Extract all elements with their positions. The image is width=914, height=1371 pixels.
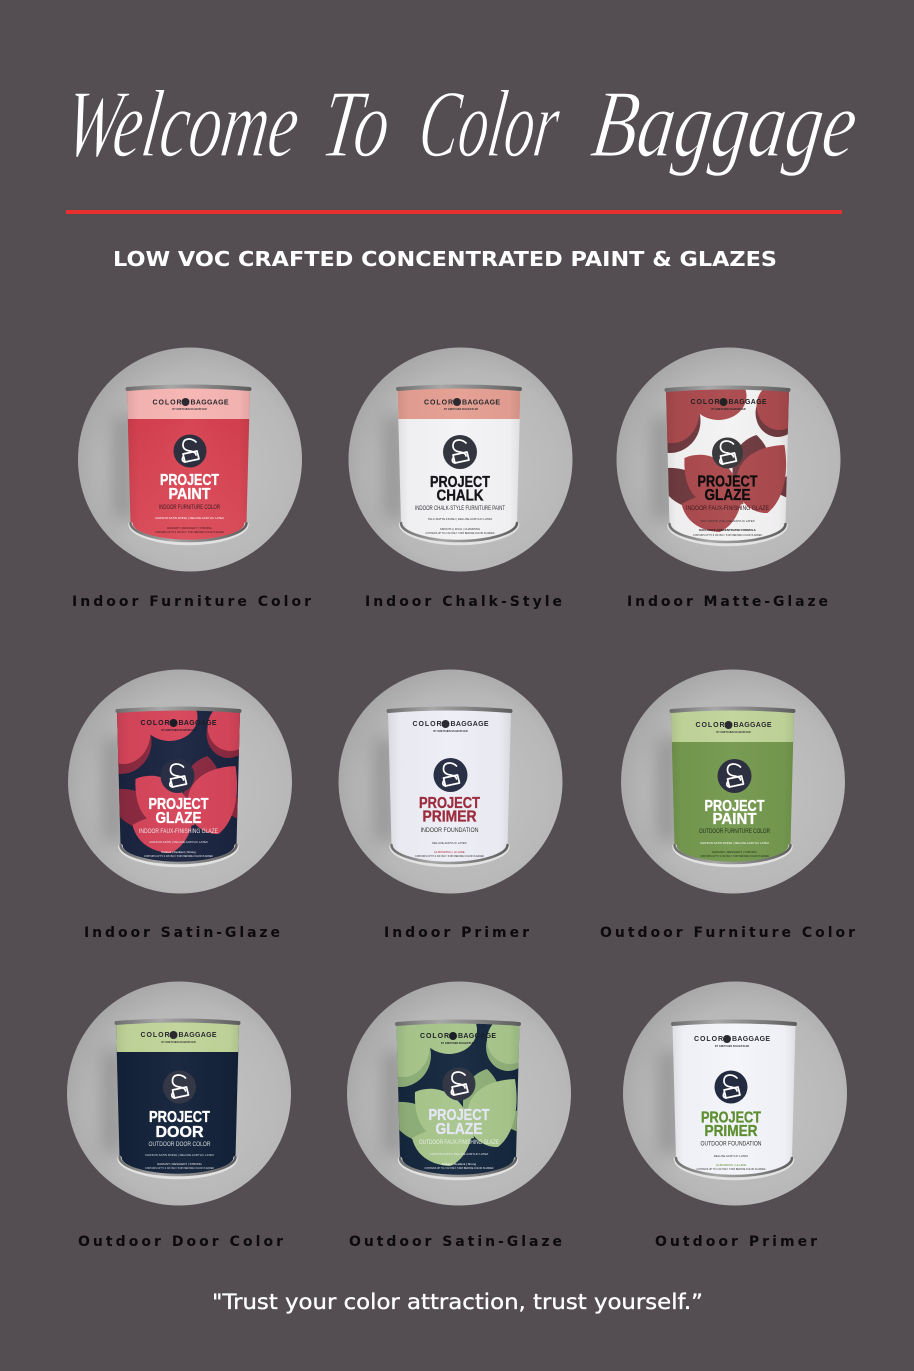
can: Project Paint outdoor: PROJECT xyxy=(704,798,765,815)
can: Project Primer outdoor: PROJECT xyxy=(701,1110,761,1126)
can: Project Primer indoor: DELUXE ACRYLIC LATEX xyxy=(432,841,467,845)
can: Project Paint: PAINT xyxy=(168,486,211,503)
label row 1 xyxy=(72,594,828,610)
product: Indoor Chalk-Style xyxy=(348,348,572,572)
can: Project Paint: BY GRETCHEN SCHAUFFLER xyxy=(172,408,207,411)
can: Project Paint: BAGGAGE xyxy=(190,400,229,406)
can: Project Primer indoor: BAGGAGE xyxy=(450,721,489,728)
product: Outdoor Satin-Glaze xyxy=(347,982,571,1206)
can: Project Chalk: CONTAINS UP TO 2 OZ ONLY. 5 MIX BEFORE COLOR IS ADDED xyxy=(426,532,495,535)
can: Project Paint outdoor: BY GRETCHEN SCHAUFFLER xyxy=(716,731,751,734)
can: Project Chalk: BY GRETCHEN SCHAUFFLER xyxy=(444,408,478,411)
product: Indoor Satin-Glaze xyxy=(68,670,292,894)
can: Project Paint: CONTAINS UP TO 2 OZ ONLY. 5 MIX BEFORE COLOR IS ADDED xyxy=(155,531,224,534)
can: Project Primer indoor: BY GRETCHEN SCHAUFFLER xyxy=(433,730,468,733)
can: Project Chalk: COLOR xyxy=(424,400,453,406)
can: Project Glaze indoor: GLAZE xyxy=(156,810,202,827)
can: Project Door: DOOR xyxy=(156,1124,204,1141)
can: Project Paint outdoor: PAINT xyxy=(712,811,757,828)
can: Project Door: BAGGAGE xyxy=(178,1032,217,1039)
can: Project Primer outdoor: DELUXE ACRYLIC LATEX xyxy=(714,1154,748,1158)
can: Project Glaze matte: BAGGAGE xyxy=(728,399,767,406)
can: Project Chalk: INDOOR CHALK-STYLE FURNITURE PAINT xyxy=(415,506,505,512)
can: Project Paint xyxy=(112,385,252,550)
label row 2 xyxy=(84,925,855,941)
can: Project Primer outdoor: COLOR xyxy=(694,1036,723,1043)
can: Project Glaze indoor: PROJECT xyxy=(148,796,209,813)
title: Color xyxy=(413,70,566,177)
can: Project Glaze outdoor: CHIFFON SATIN | DELUXE ACRYLIC LATEX xyxy=(430,1152,488,1156)
can: Project Glaze indoor: COLOR xyxy=(140,720,170,727)
can: Project Primer outdoor: HI-BONDING | HI-HIDE xyxy=(716,1163,746,1167)
can: Project Glaze indoor: CONTAINS UP TO 2 OZ ONLY. 5 MIX BEFORE COLOR IS ADDED xyxy=(144,855,213,858)
can: Project Glaze outdoor: CONTAINS UP TO 2 OZ ONLY. 5 MIX BEFORE COLOR IS ADDED xyxy=(425,1167,494,1170)
title: To xyxy=(316,70,397,177)
can: Project Glaze matte xyxy=(646,386,790,546)
product: Indoor Primer xyxy=(338,670,562,894)
can: Project Paint outdoor: CHIFFON SATIN FINISH | DELUXE ACRYLIC LATEX xyxy=(700,841,769,845)
can: Project Glaze matte: COLOR xyxy=(690,399,720,406)
product: Outdoor Primer xyxy=(623,982,847,1206)
title: Welcome xyxy=(59,70,306,177)
can: Project Primer indoor: PRIMER xyxy=(422,808,477,826)
label row 3 xyxy=(78,1234,817,1250)
can: Project Door: OUTDOOR DOOR COLOR xyxy=(148,1142,211,1148)
can: Project Glaze outdoor: COLOR xyxy=(420,1033,449,1040)
can: Project Chalk: TALC MATTE FINISH | DELUXE ACRYLIC LATEX xyxy=(428,517,492,521)
label row 1: Indoor Chalk-Style xyxy=(365,594,562,610)
label row 2: Outdoor Furniture Color xyxy=(600,925,855,941)
can: Project Primer outdoor: CONTAINS UP TO 2 OZ ONLY. 5 MIX BEFORE COLOR IS ADDED xyxy=(697,1168,766,1171)
label row 2: Indoor Satin-Glaze xyxy=(84,925,280,941)
can: Project Door: PROJECT xyxy=(149,1109,210,1126)
can: Project Glaze matte: BY GRETCHEN SCHAUFFLER xyxy=(711,408,746,411)
can: Project Door xyxy=(102,1019,240,1184)
can: Project Chalk xyxy=(383,385,522,550)
product: Outdoor Door Color xyxy=(67,982,291,1206)
can: Project Primer indoor: COLOR xyxy=(412,721,442,728)
red divider line xyxy=(66,210,842,214)
can: Project Chalk: SMOOTH | RICH | CHARMING xyxy=(440,527,481,531)
can: Project Paint outdoor: BAGGAGE xyxy=(734,722,772,729)
can: Project Primer indoor: INDOOR FOUNDATION xyxy=(420,828,478,834)
can: Project Glaze indoor: BY GRETCHEN SCHAUFFLER xyxy=(161,729,196,732)
can: Project Glaze indoor: INDOOR FAUX-FINISHING GLAZE xyxy=(139,829,218,835)
can: Project Primer indoor: PROJECT xyxy=(419,795,480,812)
can: Project Chalk: BAGGAGE xyxy=(462,400,500,406)
can: Project Glaze outdoor xyxy=(376,1020,521,1180)
can: Project Primer indoor xyxy=(374,707,512,872)
can: Project Door: BY GRETCHEN SCHAUFFLER xyxy=(161,1041,196,1044)
can: Project Primer outdoor: BY GRETCHEN SCHAUFFLER xyxy=(715,1045,749,1048)
can: Project Door: CHIFFON SATIN FINISH | DELUXE ACRYLIC LATEX xyxy=(145,1153,214,1157)
can: Project Door: RADIANT | RESILIENT | STRONG xyxy=(157,1162,203,1166)
can: Project Glaze indoor xyxy=(96,706,242,868)
can: Project Glaze matte: INDOOR FAUX-FINISHING GLAZE xyxy=(686,506,769,512)
label row 2: Indoor Primer xyxy=(384,925,529,941)
can: Project Paint: INDOOR FURNITURE COLOR xyxy=(159,505,220,511)
label row 3: Outdoor Satin-Glaze xyxy=(349,1234,562,1250)
can: Project Glaze outdoor: OUTDOOR FAUX-FINISHING GLAZE xyxy=(419,1140,499,1146)
label row 1: Indoor Matte-Glaze xyxy=(627,594,828,610)
can: Project Glaze outdoor: BAGGAGE xyxy=(458,1033,496,1040)
can: Project Primer outdoor xyxy=(658,1020,797,1185)
label row 3: Outdoor Door Color xyxy=(78,1234,283,1250)
can: Project Door: CONTAINS UP TO 2 OZ ONLY. 5 MIX BEFORE COLOR IS ADDED xyxy=(145,1167,214,1170)
can: Project Paint outdoor xyxy=(656,707,796,872)
can: Project Glaze indoor: CHIFFON SATIN | DELUXE ACRYLIC LATEX xyxy=(149,840,208,844)
can: Project Glaze matte: GLAZE xyxy=(704,487,751,504)
can: Project Glaze matte: PROJECT xyxy=(698,474,758,490)
can: Project Glaze matte: CONTAINS UP TO 2 OZ ONLY. 5 MIX BEFORE COLOR IS ADDED xyxy=(693,534,762,537)
can: Project Glaze indoor: BAGGAGE xyxy=(178,720,217,727)
product: Indoor Furniture Color xyxy=(78,348,302,572)
can: Project Door: COLOR xyxy=(140,1032,170,1039)
can: Project Paint outdoor: RADIANT | RESILIENT | STRONG xyxy=(712,850,758,854)
can: Project Chalk: CHALK xyxy=(436,488,484,504)
can: Project Paint: PROJECT xyxy=(160,472,219,489)
can: Project Paint: RADIANT | RESILIENT | STRONG xyxy=(167,526,213,530)
can: Project Primer indoor: CONTAINS UP TO 2 OZ ONLY. 5 MIX BEFORE COLOR IS ADDED xyxy=(415,855,484,858)
can: Project Paint: CHIFFON SATIN FINISH | DELUXE ACRYLIC LATEX xyxy=(155,516,224,520)
product: Outdoor Furniture Color xyxy=(621,670,845,894)
can: Project Glaze matte: EXCLUSIVE CONCENTRATED FORMULA xyxy=(699,528,757,532)
can: Project Primer outdoor: PRIMER xyxy=(704,1123,758,1140)
can: Project Glaze outdoor: GLAZE xyxy=(436,1121,483,1138)
can: Project Paint outdoor: COLOR xyxy=(696,722,724,729)
can: Project Paint: COLOR xyxy=(152,400,182,406)
subtitle: LOW VOC CRAFTED CONCENTRATED PAINT & GLAZES xyxy=(113,247,777,271)
can: Project Primer outdoor: OUTDOOR FOUNDATION xyxy=(700,1142,762,1148)
product: Indoor Matte-Glaze xyxy=(616,348,840,572)
can: Project Chalk: PROJECT xyxy=(430,474,490,491)
label row 1: Indoor Furniture Color xyxy=(72,594,311,610)
can: Project Glaze outdoor: BY GRETCHEN SCHAUFFLER xyxy=(441,1042,475,1045)
can: Project Glaze matte: TALC MATTE | DELUXE ACRYLIC LATEX xyxy=(700,519,755,523)
can: Project Paint outdoor: OUTDOOR FURNITURE COLOR xyxy=(699,829,771,835)
can: Project Glaze outdoor: PROJECT xyxy=(428,1107,490,1124)
label row 3: Outdoor Primer xyxy=(655,1234,817,1250)
closing quote: "Trust your color attraction, trust yourself.” xyxy=(212,1290,703,1314)
can: Project Glaze indoor: Radiant | Resilient | Strong xyxy=(161,850,196,854)
can: Project Glaze outdoor: Radiant | Resilient | Strong xyxy=(442,1162,477,1166)
can: Project Primer indoor: HI-BONDING | HI-HIDE xyxy=(434,850,465,854)
can: Project Paint outdoor: CONTAINS UP TO 2 OZ ONLY. 5 MIX BEFORE COLOR IS ADDED xyxy=(700,855,769,858)
title xyxy=(59,70,864,177)
can: Project Primer outdoor: BAGGAGE xyxy=(732,1036,770,1043)
